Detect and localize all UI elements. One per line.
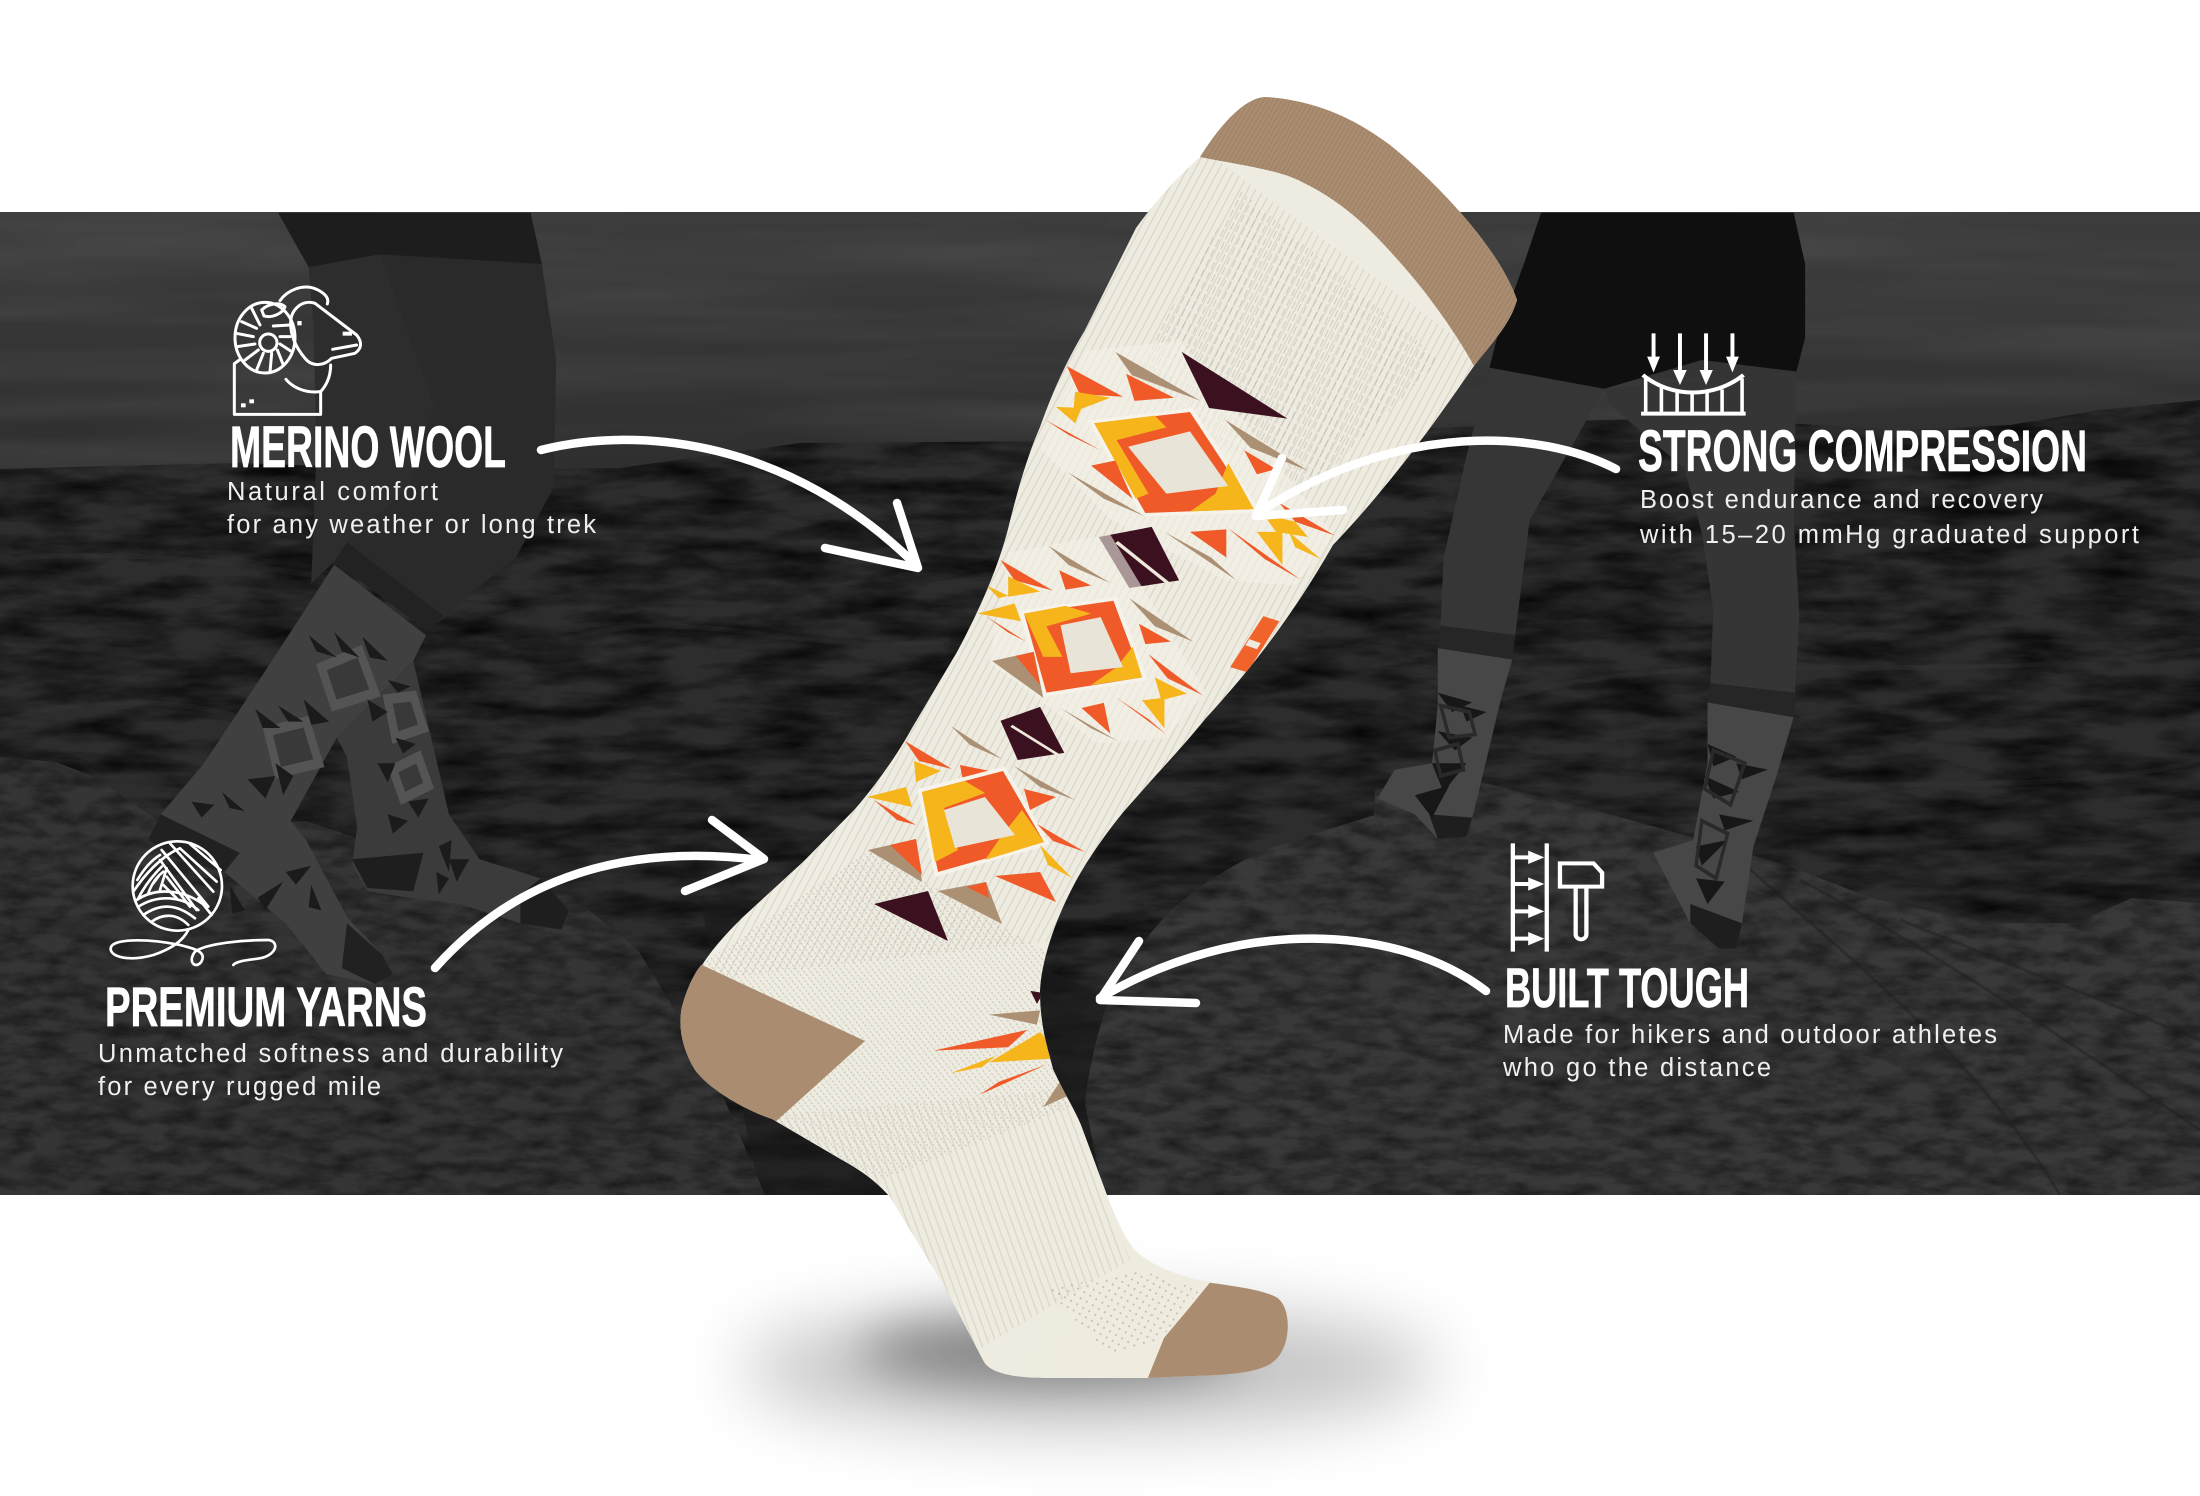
- knit textures: [700, 140, 1500, 1360]
- ground shadow under sock: [740, 1308, 1440, 1428]
- description: [1502, 1021, 1997, 1082]
- description: [1639, 486, 2139, 549]
- left hiker legs: [148, 213, 569, 984]
- land with eroded ridges: [0, 400, 2200, 1195]
- arrow: merino wool to sock: [541, 440, 918, 568]
- heading: MERINO WOOL: [230, 415, 506, 480]
- lower aztec motif: [867, 726, 1085, 941]
- arrow: premium yarns to sock: [435, 820, 764, 968]
- heel patch: [680, 965, 865, 1122]
- feature: built tough: [1502, 843, 1997, 1082]
- sky: [0, 212, 2200, 482]
- heading: PREMIUM YARNS: [105, 975, 427, 1038]
- description: Unmatched softness and durability: [98, 1040, 563, 1068]
- toe patch: [1148, 1282, 1288, 1378]
- description: for any weather or long trek: [227, 511, 596, 539]
- icon: ball of yarn: [111, 841, 275, 965]
- description: for every rugged mile: [98, 1073, 381, 1101]
- right hiker legs: [1377, 213, 1805, 949]
- icon: wall and hammer: [1513, 843, 1602, 952]
- cuff band: [1200, 97, 1517, 366]
- sock body: [680, 97, 1517, 1378]
- middle aztec motif: [978, 534, 1279, 760]
- arrow: built tough to sock: [1100, 939, 1486, 1003]
- icon: compression arrows over bridge: [1641, 333, 1746, 414]
- description: with 15–20 mmHg graduated support: [1639, 521, 2139, 549]
- feature: premium yarns: [98, 841, 563, 1101]
- left rock: [0, 757, 765, 1195]
- description: [227, 478, 596, 539]
- ankle aztec fragment: [934, 991, 1070, 1107]
- icon: ram: [234, 287, 361, 414]
- arrow: strong compression to sock: [1256, 441, 1616, 516]
- sock product: [660, 80, 1540, 1385]
- right rock: [1085, 780, 2200, 1195]
- heading: BUILT TOUGH: [1505, 956, 1749, 1019]
- description: who go the distance: [1502, 1054, 1771, 1082]
- top aztec motif: [1040, 341, 1335, 588]
- feature: merino wool: [227, 287, 596, 539]
- panel: dark landscape photo band: [0, 212, 2200, 1195]
- gap shadow between rocks: [705, 912, 1106, 1178]
- description: Made for hikers and outdoor athletes: [1503, 1021, 1997, 1049]
- feature: strong compression: [1638, 333, 2139, 549]
- description: [98, 1040, 563, 1101]
- description: Boost endurance and recovery: [1640, 486, 2043, 514]
- description: Natural comfort: [227, 478, 438, 506]
